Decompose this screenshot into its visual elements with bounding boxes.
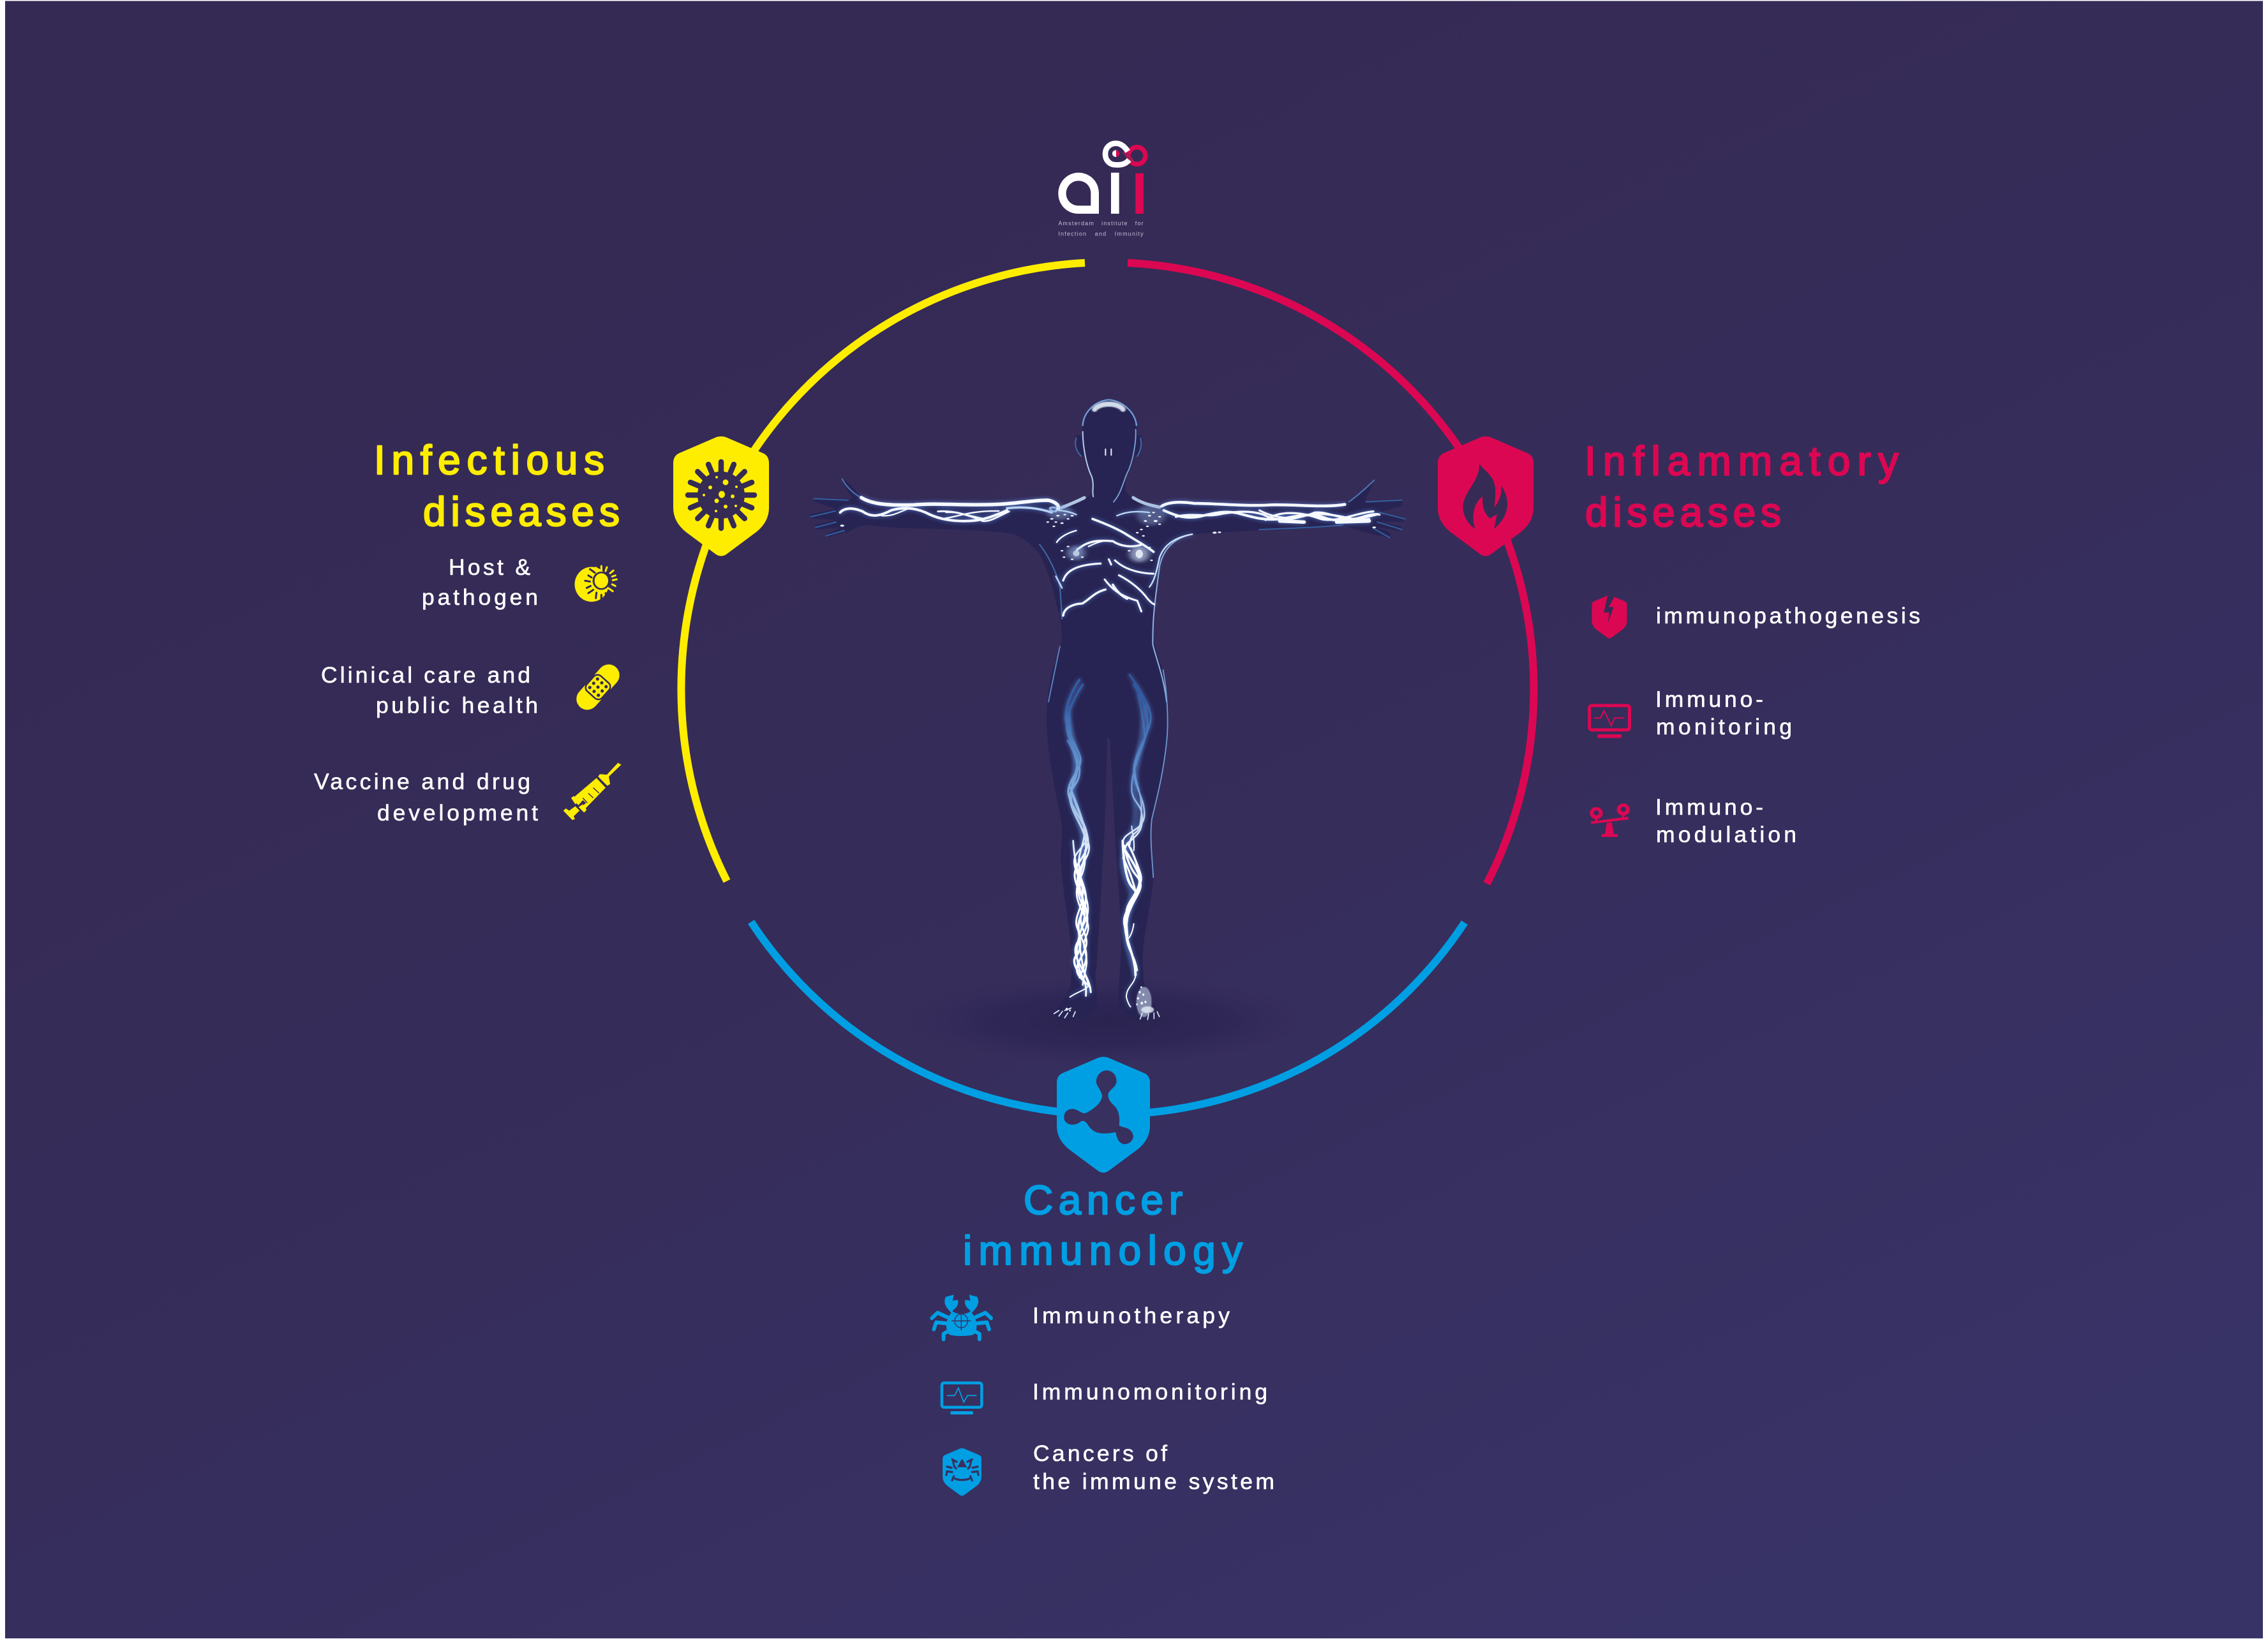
item: immuno-monitoring: Immuno- bbox=[1655, 686, 1763, 712]
human figure with glowing vessels bbox=[810, 399, 1405, 1021]
glowing vessels: arms and torso bbox=[840, 498, 1380, 616]
item: immunotherapy bbox=[932, 1294, 1230, 1339]
logo: aii Amsterdam institute for Infection and Immunity bbox=[1058, 144, 1145, 237]
icon: shield with crab bbox=[943, 1448, 981, 1495]
item: vaccine and drug development: Vaccine and drug bbox=[314, 769, 530, 794]
heading: cancer immunology: immunology bbox=[963, 1227, 1242, 1273]
logo letter i red bbox=[1135, 174, 1144, 214]
item: cancers of the immune system: the immune system bbox=[1033, 1469, 1274, 1494]
body edge highlights and head bbox=[811, 400, 1405, 702]
soft light under the leg vessels bbox=[1068, 706, 1145, 992]
item: cancers of the immune system bbox=[943, 1441, 1274, 1495]
icon: bandage bbox=[572, 660, 624, 715]
panel: inflammatory diseases bbox=[1438, 436, 1920, 847]
shield icon: molecule bbox=[1057, 1057, 1150, 1173]
item: immuno-modulation bbox=[1590, 794, 1796, 847]
item: clinical care and public health bbox=[321, 660, 624, 718]
floor shadow below figure bbox=[903, 976, 1311, 1065]
feet speckles bbox=[1054, 986, 1160, 1020]
item: host and pathogen: Host & bbox=[449, 554, 530, 580]
icon: shield with lightning bolt bbox=[1592, 595, 1627, 638]
heading: inflammatory diseases: Inflammatory bbox=[1585, 438, 1899, 484]
icon: host cell and pathogen bbox=[575, 566, 616, 602]
item: host and pathogen bbox=[422, 554, 616, 610]
logo tagline bbox=[1058, 220, 1144, 237]
item: immunomonitoring: Immunomonitoring bbox=[1033, 1379, 1267, 1405]
item: host and pathogen: pathogen bbox=[422, 584, 538, 610]
item: immunomonitoring bbox=[942, 1379, 1267, 1414]
item: clinical care and public health: public health bbox=[376, 693, 538, 718]
right leg strands bbox=[1123, 675, 1151, 1007]
panel: infectious diseases bbox=[314, 436, 769, 826]
heading: infectious diseases bbox=[374, 437, 620, 535]
heading: cancer immunology: Cancer bbox=[1024, 1177, 1182, 1223]
heading: cancer immunology bbox=[963, 1177, 1242, 1273]
item: immunopathogenesis: immunopathogenesis bbox=[1656, 603, 1920, 628]
body silhouette bbox=[810, 399, 1404, 1021]
item: cancers of the immune system: Cancers of bbox=[1033, 1441, 1167, 1466]
item: immuno-modulation: Immuno- bbox=[1655, 794, 1763, 820]
item: immuno-monitoring bbox=[1590, 686, 1792, 739]
item: immunopathogenesis bbox=[1592, 595, 1920, 638]
heading: inflammatory diseases: diseases bbox=[1585, 489, 1781, 535]
left arm vessels bbox=[840, 508, 1007, 521]
panel: cancer immunology bbox=[932, 1057, 1274, 1495]
item: immuno-monitoring: monitoring bbox=[1656, 714, 1792, 739]
icon: monitor bbox=[942, 1383, 981, 1414]
torso vessels bbox=[1093, 519, 1154, 552]
icon: syringe bbox=[563, 763, 621, 820]
logo tagline: Infection and Immunity bbox=[1058, 230, 1144, 237]
right arm vessels bbox=[1164, 510, 1377, 521]
icon: balance scale bbox=[1590, 803, 1630, 837]
logo letter i white bbox=[1111, 173, 1119, 214]
logo tagline: Amsterdam institute for bbox=[1058, 220, 1144, 226]
chest glow spots and speckles bbox=[840, 504, 1376, 562]
heading: infectious diseases: diseases bbox=[423, 489, 620, 535]
shield icon: flame bbox=[1438, 436, 1533, 556]
heading: infectious diseases: Infectious bbox=[374, 437, 604, 483]
item: immuno-modulation: modulation bbox=[1656, 822, 1796, 847]
shoulder and arm top highlights bbox=[862, 498, 1059, 509]
right leg outer edge highlight bbox=[1151, 670, 1168, 877]
blue arc: cancer immunology bbox=[751, 922, 1465, 1115]
red arc: inflammatory diseases bbox=[1128, 263, 1533, 884]
yellow arc: infectious diseases bbox=[681, 263, 1085, 881]
icon: monitor bbox=[1590, 706, 1629, 738]
heading: inflammatory diseases bbox=[1585, 438, 1899, 535]
left leg strands bbox=[1066, 679, 1091, 997]
shield icon: virus bbox=[673, 436, 769, 556]
logo letter a bbox=[1058, 173, 1099, 214]
item: immunotherapy: Immunotherapy bbox=[1033, 1303, 1230, 1328]
glowing vessels: legs bbox=[1066, 675, 1151, 1007]
icon: crab with target bbox=[932, 1294, 991, 1339]
item: vaccine and drug development: development bbox=[377, 800, 538, 826]
item: vaccine and drug development bbox=[314, 763, 621, 826]
logo infinity symbol bbox=[1105, 144, 1145, 165]
item: clinical care and public health: Clinical care and bbox=[321, 662, 530, 688]
